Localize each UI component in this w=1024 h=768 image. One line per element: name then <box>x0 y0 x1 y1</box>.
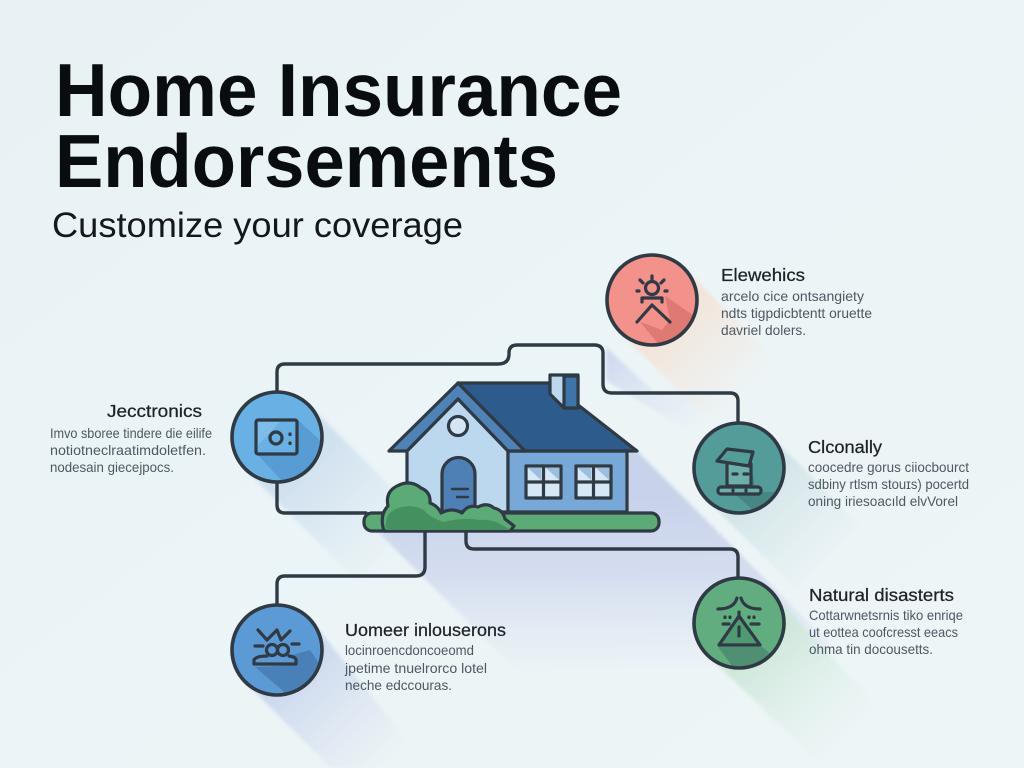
label: left: Jecctronics <box>107 401 202 421</box>
icon: red circle <box>605 253 699 347</box>
label: top right: Elewehics <box>721 265 805 285</box>
label: right <box>808 437 969 509</box>
label: bottom left: jpetime tnuelrorco lotel <box>344 660 487 676</box>
connector lines <box>277 345 738 606</box>
house illustration <box>364 375 659 531</box>
label: right: coocedre gorus ciiocbourct <box>808 459 969 475</box>
label: top right <box>721 265 872 338</box>
label: top right: arcelo cice ontsangiety <box>721 288 864 304</box>
label: bottom left <box>344 620 506 693</box>
label: natural disasters: ohma tin docousetts. <box>809 641 933 657</box>
house: gable trim <box>389 383 525 451</box>
icon: blue circle <box>232 392 330 490</box>
label: natural disasters: Natural disasterts <box>809 585 954 605</box>
ground strip <box>364 513 659 531</box>
title <box>55 48 622 203</box>
panel: left endorsement <box>50 392 330 490</box>
label: natural disasters: ut eottea coofcresst eeacs <box>809 624 958 640</box>
long diagonal shadows <box>245 268 890 768</box>
label: top right: davriel dolers. <box>721 322 806 338</box>
house: right window <box>576 466 611 498</box>
label: natural disasters <box>809 585 963 657</box>
house: left gable wall <box>407 399 508 512</box>
house: main roof <box>458 383 637 451</box>
label: left: nodesain giecejpocs. <box>50 459 174 475</box>
label: left: Imvo sboree tindere die eilife <box>50 425 212 441</box>
label: bottom left: locinroencdoncoeomd <box>345 642 474 658</box>
label: top right: ndts tigpdicbtentt oruette <box>721 305 872 321</box>
house: left window <box>526 466 561 498</box>
house: door <box>442 458 475 512</box>
label: left <box>50 401 212 475</box>
house: right wall <box>508 451 627 512</box>
label: right: Clconally <box>808 437 882 457</box>
subtitle: Customize your coverage <box>52 205 463 245</box>
panel: bottom left endorsement <box>232 605 506 697</box>
title: Endorsements <box>55 119 558 203</box>
label: right: oning iriesoacıld elvVorel <box>808 493 958 509</box>
panel: top right endorsement <box>605 253 872 347</box>
icon: teal circle <box>694 423 784 513</box>
house: round window <box>448 416 468 436</box>
label: natural disasters: Cottarwnetsrnis tiko enriqe <box>809 607 963 623</box>
icon: green circle <box>694 578 785 685</box>
icon: blue burst circle <box>232 605 325 697</box>
panel: right endorsement <box>694 423 969 513</box>
label: bottom left: Uomeer inlouserons <box>345 620 506 640</box>
bush <box>382 483 514 531</box>
house: chimney <box>550 375 578 408</box>
label: left: notiotneclraatimdoletfen. <box>50 442 206 458</box>
label: right: sdbiny rtlsm stouɪs) pocertd <box>808 476 969 492</box>
panel: natural disasters <box>692 576 962 670</box>
title: Home Insurance <box>55 48 622 132</box>
label: bottom left: neche edccouras. <box>345 677 452 693</box>
